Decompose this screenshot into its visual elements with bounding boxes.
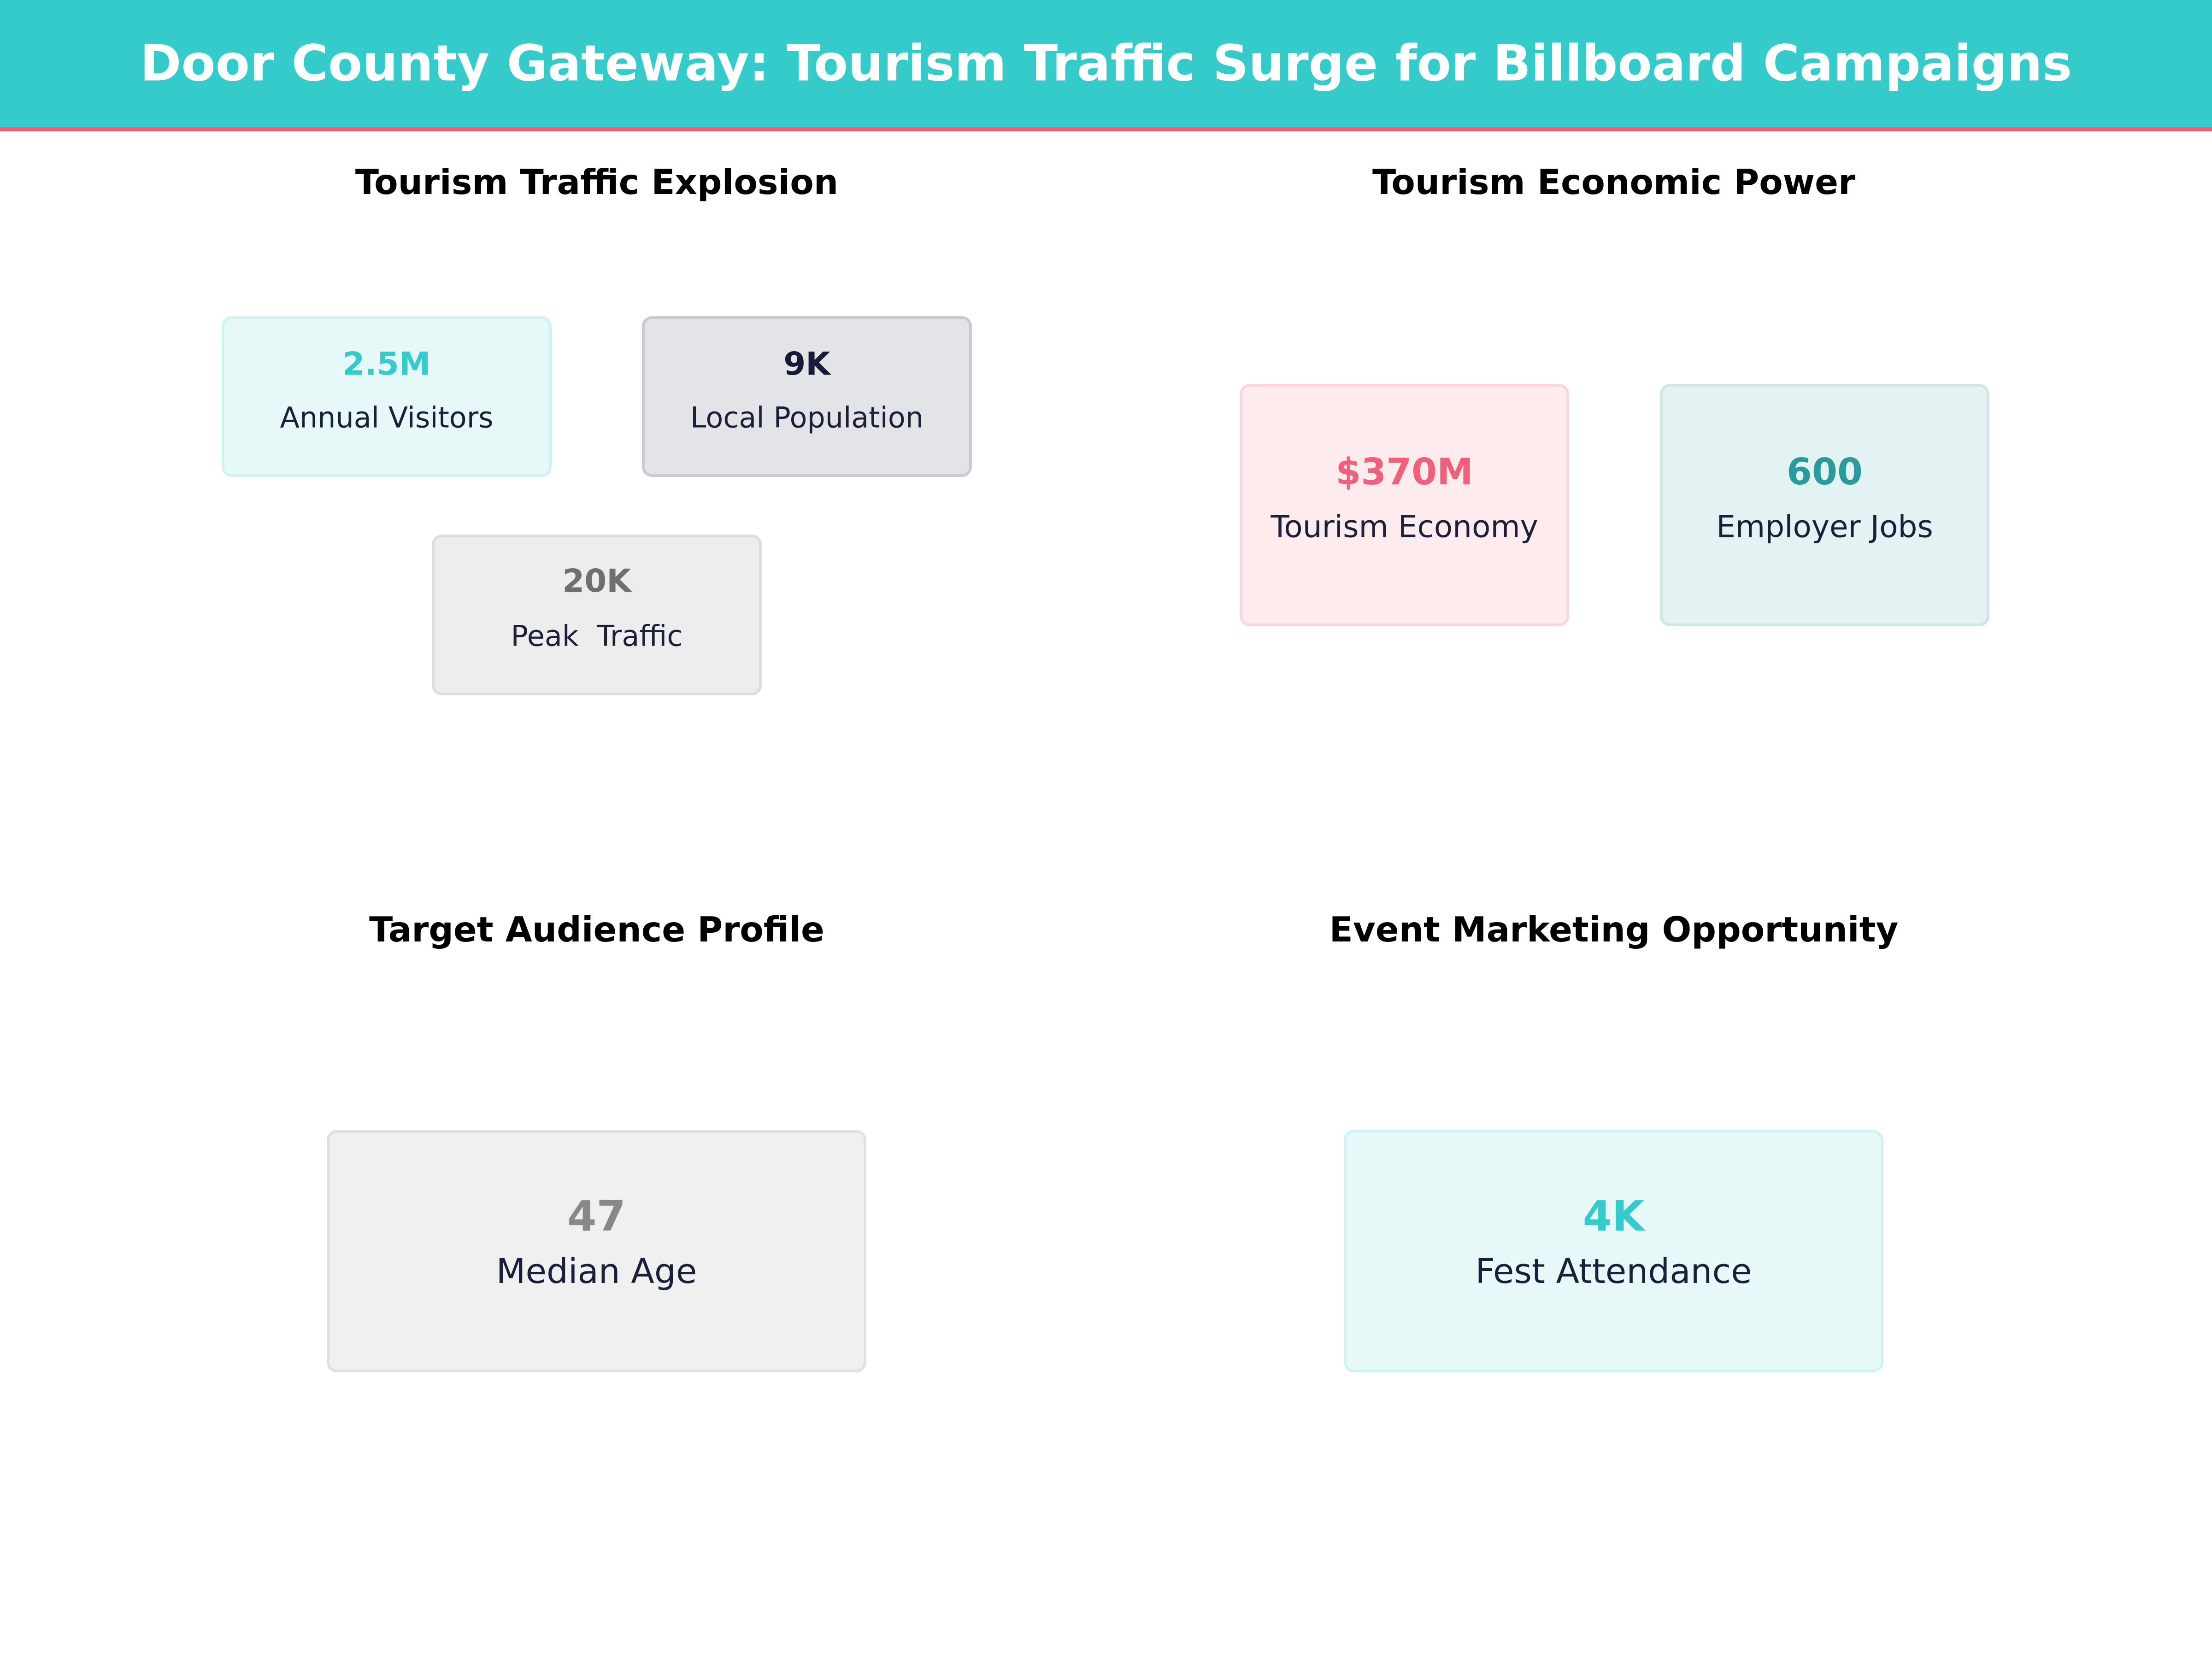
- card: peak traffic: Peak Traffic: [511, 619, 682, 653]
- card: median age: Median Age: [496, 1252, 697, 1291]
- card: local population: 9K: [783, 346, 830, 382]
- card: fest attendance: Fest Attendance: [1475, 1252, 1752, 1291]
- card: employer jobs: 600: [1787, 451, 1863, 493]
- card: tourism economy: $370M: [1335, 451, 1473, 493]
- card: peak traffic: [432, 535, 762, 695]
- card: employer jobs: [1660, 384, 1989, 626]
- card: fest attendance: [1344, 1130, 1883, 1372]
- card: annual visitors: 2.5M: [343, 346, 430, 382]
- card: local population: Local Population: [690, 401, 924, 434]
- card: median age: [327, 1130, 866, 1372]
- header: [0, 0, 2212, 131]
- card: tourism economy: Tourism Economy: [1271, 509, 1538, 545]
- card: peak traffic: 20K: [562, 563, 631, 600]
- card: median age: 47: [567, 1193, 626, 1241]
- card: fest attendance: 4K: [1583, 1193, 1644, 1241]
- panel title: audience: Target Audience Profile: [369, 909, 824, 950]
- panel title: economy: Tourism Economic Power: [1372, 162, 1855, 202]
- card: employer jobs: Employer Jobs: [1716, 509, 1933, 545]
- card: tourism economy: [1240, 384, 1569, 626]
- panel title: events: Event Marketing Opportunity: [1330, 909, 1898, 950]
- card: local population: [642, 316, 972, 477]
- title: Door County Gateway: Tourism Traffic Surge for Billboard Campaigns: [140, 35, 2072, 92]
- card: annual visitors: Annual Visitors: [280, 401, 494, 434]
- panel title: traffic: Tourism Traffic Explosion: [355, 162, 838, 202]
- card: annual visitors: [222, 316, 552, 477]
